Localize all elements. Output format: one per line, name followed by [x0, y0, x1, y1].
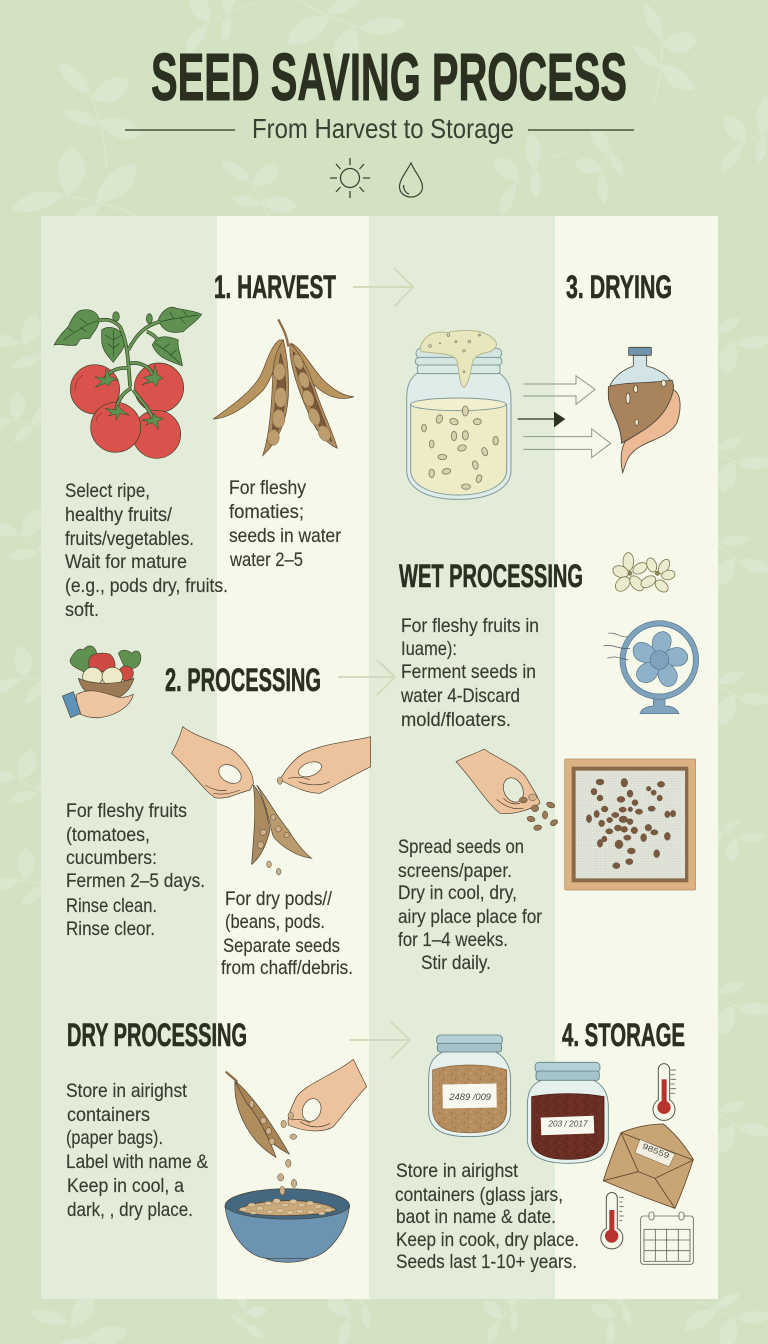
text: dry storage: (paper bags).	[66, 1127, 163, 1149]
column 4	[555, 216, 718, 1299]
text: dry storage: Store in airighst	[66, 1080, 188, 1102]
text: harvest right	[229, 477, 341, 571]
subtitle with rules: From Harvest to Storage	[252, 113, 514, 144]
text: dry pods: (beans, pods.	[225, 911, 325, 933]
illustration: seed jars: 203 / 2017	[547, 1119, 589, 1129]
text: harvest left: Wait for mature	[65, 551, 187, 573]
text: drying: Stir daily.	[421, 952, 491, 974]
text: dry storage: Label with name &	[66, 1151, 208, 1173]
icon: sun	[330, 158, 370, 198]
arrows: jar to bottle	[518, 376, 611, 458]
text: dry storage	[66, 1080, 208, 1221]
column 1	[41, 216, 217, 1299]
text: fleshy fruits: For fleshy fruits	[66, 800, 187, 822]
text: drying: for 1–4 weeks.	[398, 929, 508, 951]
text: drying: Spread seeds on	[398, 836, 524, 858]
text: fleshy fruits: Rinse cleor.	[66, 918, 155, 940]
text: wet processing	[400, 615, 539, 731]
text: storage: Store in airighst	[396, 1160, 519, 1182]
icon: flower seed heads	[611, 553, 676, 595]
text: dry pods: Separate seeds	[223, 935, 340, 957]
illustration: hand holding bowl	[62, 646, 141, 718]
text: storage: Keep in cook, dry place.	[396, 1229, 579, 1251]
icon: thermometer top	[653, 1064, 676, 1120]
text: fleshy fruits: Fermen 2–5 days.	[66, 870, 205, 892]
arrow: harvest to drying	[353, 268, 413, 307]
illustration: seed jars: 2489 /009	[448, 1092, 491, 1102]
column 2	[217, 216, 369, 1299]
text: wet processing: mold/floaters.	[401, 709, 511, 731]
icon: fan	[603, 621, 699, 714]
text: harvest left	[65, 480, 228, 621]
text: drying: Dry in cool, dry,	[398, 882, 517, 904]
text: harvest left: fruits/vegetables.	[65, 528, 194, 550]
text: storage: Seeds last 1-10+ years.	[396, 1251, 577, 1273]
text: fleshy fruits: cucumbers:	[66, 847, 157, 869]
heading: dry processing: DRY PROCESSING	[67, 1017, 247, 1053]
illustration: pod, hand and bowl	[225, 1059, 367, 1262]
text: wet processing: Iuame):	[401, 638, 457, 660]
text: fleshy fruits: (tomatoes,	[66, 824, 150, 846]
icon: water drop	[400, 163, 422, 197]
arrow: processing to wet processing	[338, 660, 395, 695]
text: wet processing: water 4-Discard	[400, 685, 520, 707]
text: wet processing: Ferment seeds in	[401, 661, 536, 683]
text: fleshy fruits	[66, 800, 205, 940]
main panel with alternating columns	[41, 216, 718, 1299]
illustration: tomato vine	[54, 307, 202, 458]
text: harvest right: water 2–5	[229, 549, 303, 571]
icon: calendar	[641, 1212, 693, 1264]
text: dry storage: Keep in cool, a	[67, 1175, 184, 1197]
heading: wet processing: WET PROCESSING	[399, 558, 583, 594]
illustration: bottle with seeds in hand	[608, 347, 680, 473]
illustration: hands opening pod	[172, 727, 371, 875]
text: fleshy fruits: Rinse clean.	[66, 895, 157, 917]
text: storage	[395, 1160, 579, 1273]
text: drying	[398, 836, 542, 974]
icon: thermometer bottom	[601, 1192, 624, 1249]
text: harvest left: healthy fruits/	[65, 504, 173, 526]
illustration: seed jars	[429, 1035, 608, 1163]
illustration: fermenting jar	[407, 330, 511, 499]
text: harvest left: Select ripe,	[65, 480, 150, 502]
text: harvest left: soft.	[65, 599, 99, 621]
heading: 3. Drying: 3. DRYING	[566, 269, 672, 305]
illustration: hand spreading seeds	[456, 749, 559, 831]
text: dry pods	[221, 888, 353, 979]
text: harvest right: For fleshy	[229, 477, 306, 499]
heading: 2. Processing: 2. PROCESSING	[165, 662, 321, 698]
text: dry storage: dark, , dry place.	[67, 1199, 193, 1221]
arrow: dry processing to storage	[349, 1022, 410, 1059]
text: drying: airy place place for	[398, 906, 542, 928]
text: dry pods: from chaff/debris.	[221, 957, 353, 979]
text: harvest right: seeds in water	[229, 525, 341, 547]
text: harvest right: fomaties;	[229, 501, 304, 523]
heading: 4. Storage: 4. STORAGE	[562, 1017, 685, 1053]
text: harvest left: (e.g., pods dry, fruits.	[65, 575, 228, 597]
column 3	[369, 216, 555, 1299]
text: dry pods: For dry pods//	[225, 888, 333, 910]
icon: seed envelope	[603, 1124, 693, 1208]
heading: 1. Harvest: 1. HARVEST	[214, 269, 336, 305]
text: drying: screens/paper.	[398, 860, 512, 882]
text: storage: containers (glass jars,	[395, 1184, 563, 1206]
text: wet processing: For fleshy fruits in	[401, 615, 539, 637]
icon: seed envelope: 98559	[641, 1142, 671, 1161]
text: storage: baot in name & date.	[396, 1206, 556, 1228]
illustration: bean pods	[213, 319, 354, 456]
text: dry storage: containers	[67, 1104, 150, 1126]
illustration: drying screen with seeds	[565, 759, 696, 890]
